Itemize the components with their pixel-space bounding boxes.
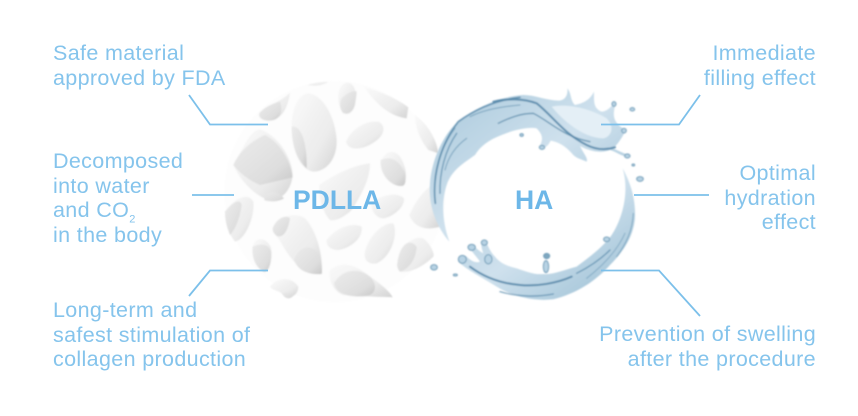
text: safe material: Safe material: [53, 41, 184, 65]
line: long-term: [189, 270, 268, 296]
text: safe material: [53, 41, 226, 90]
text: long-term: safest stimulation of: [53, 322, 250, 346]
text: prevention of swelling: Prevention of swelling: [599, 322, 816, 346]
text: long-term: [53, 298, 250, 371]
text: prevention of swelling: after the procedure: [628, 346, 816, 370]
lower swirl dark streaks: [470, 213, 633, 296]
text: optimal hydration: [724, 161, 816, 234]
text: decomposed: in the body: [53, 222, 162, 246]
label: PDLLA: PDLLA: [293, 185, 381, 215]
text: decomposed: Decomposed: [53, 149, 183, 173]
text: immediate filling: filling effect: [704, 66, 816, 90]
label: HA: HA: [515, 185, 553, 215]
leader lines: [189, 95, 709, 316]
line: hydration: [634, 194, 709, 196]
text: prevention of swelling: [599, 322, 816, 370]
text: optimal hydration: effect: [762, 210, 816, 234]
text: safe material: approved by FDA: [53, 66, 226, 90]
line: decomposed: [192, 194, 234, 196]
upper swirl dark streaks: [435, 97, 615, 203]
text: immediate filling: Immediate: [712, 41, 816, 65]
text: long-term: Long-term and: [53, 298, 197, 322]
text: decomposed: into water: [53, 174, 150, 198]
text: decomposed: and CO2: [53, 198, 136, 225]
lower water swirl with splash: [458, 168, 635, 300]
text: optimal hydration: Optimal: [739, 161, 816, 185]
line: prevention: [601, 270, 700, 316]
text: long-term: collagen production: [53, 347, 246, 371]
sphere: PDLLA porous material: [224, 81, 446, 302]
upper water swirl with splash: [430, 88, 630, 242]
water ring: HA: [430, 88, 643, 300]
line: immediate: [601, 95, 700, 124]
line: safe material: [189, 95, 268, 124]
text: decomposed: [53, 149, 183, 246]
text: immediate filling: [704, 41, 816, 90]
text: optimal hydration: hydration: [724, 186, 816, 210]
splash highlight: [552, 106, 611, 138]
water droplets: [431, 102, 643, 276]
